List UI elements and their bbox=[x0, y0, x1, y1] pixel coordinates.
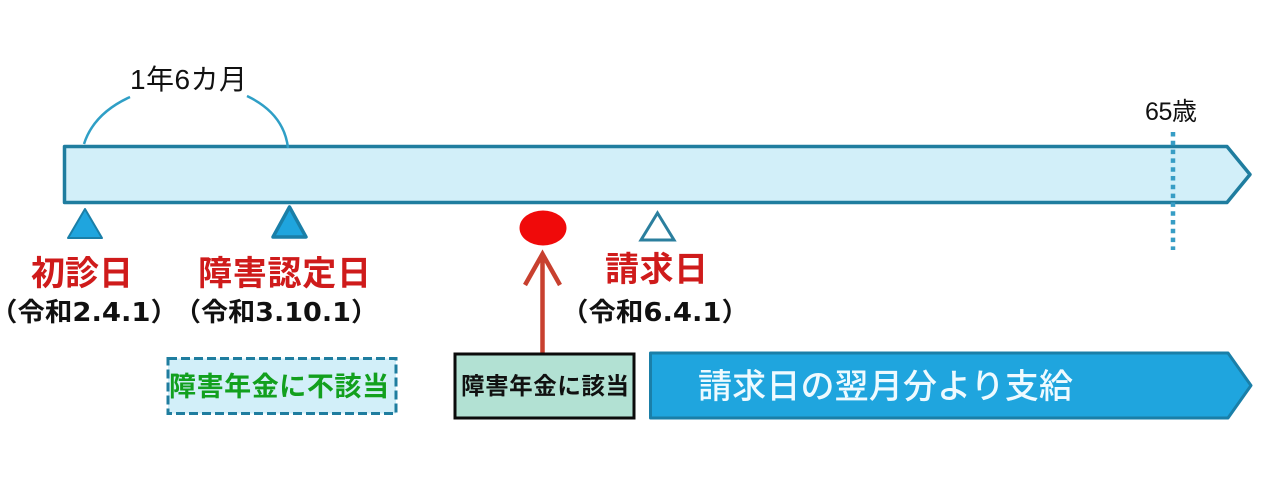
label: not eligible: 障害年金に不該当 bbox=[169, 372, 389, 402]
label: eligible: 障害年金に該当 bbox=[461, 373, 629, 399]
timeline bar arrow bbox=[64, 146, 1250, 202]
icon: triangle disability certification date bbox=[273, 207, 306, 237]
label: 1 year 6 months: 1年6カ月 bbox=[130, 64, 247, 95]
panel: eligible bbox=[455, 354, 634, 418]
icon: hollow triangle claim date bbox=[641, 213, 674, 240]
label: age 65: 65歳 bbox=[1145, 98, 1197, 126]
heading: claim date: 請求日 bbox=[605, 251, 708, 289]
heading: disability certification date: 障害認定日 bbox=[198, 255, 371, 293]
icon: triangle first visit date bbox=[68, 209, 102, 238]
arrow: up to red circle bbox=[525, 254, 560, 353]
icon: red circle bbox=[520, 210, 566, 246]
date: claim: （令和6.4.1） bbox=[561, 298, 749, 328]
heading: first visit date: 初診日 bbox=[31, 255, 133, 293]
label: payment start: 請求日の翌月分より支給 bbox=[698, 368, 1073, 406]
date: disability certification: （令和3.10.1） bbox=[174, 298, 378, 328]
panel: not eligible bbox=[168, 358, 396, 414]
bracket: 1 year 6 months bbox=[84, 64, 288, 148]
panel: payment arrow bbox=[650, 353, 1251, 418]
